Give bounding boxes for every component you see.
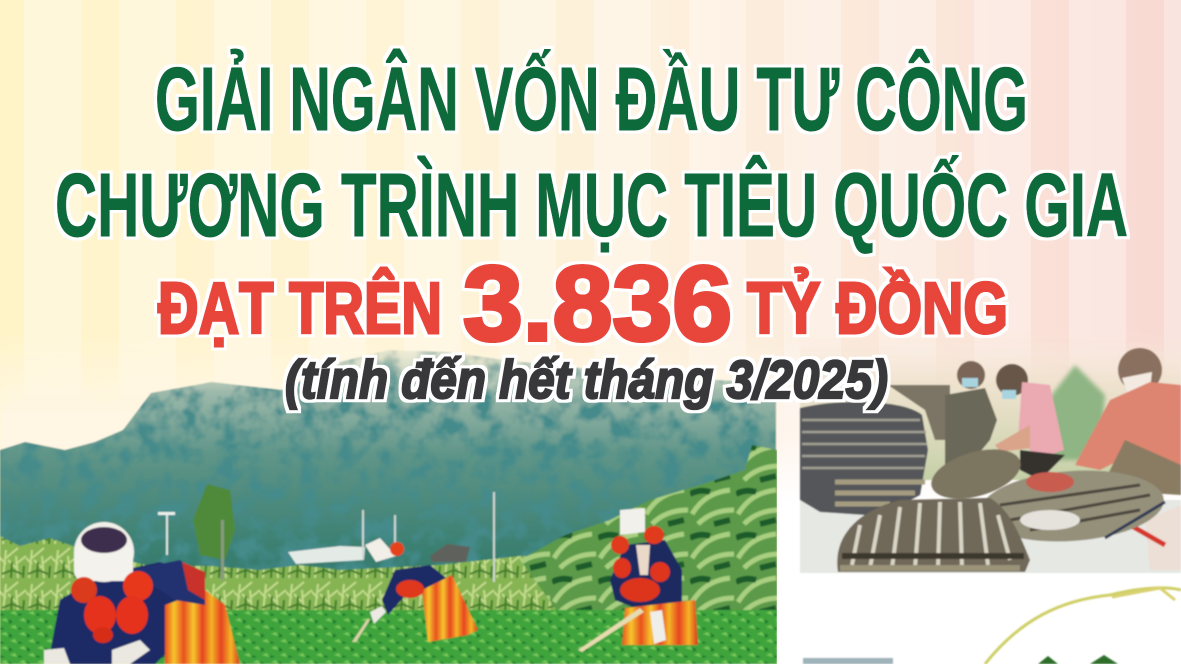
sky (0, 335, 777, 500)
tree (193, 484, 235, 560)
white gutter between photos (777, 340, 1181, 664)
photo: people weaving baskets (800, 330, 1181, 573)
subtitle: date note: (tính đến hết tháng 3/2025) (285, 350, 888, 410)
person: left weaver (945, 361, 997, 470)
corn field (0, 536, 600, 615)
lamp post (166, 515, 168, 555)
middle tray (926, 440, 1026, 508)
mountain (0, 350, 776, 610)
person: pink shirt (995, 364, 1065, 480)
figure: middle woman (352, 538, 478, 642)
banana trees (520, 445, 777, 615)
round woven basket (837, 498, 1030, 572)
backdrop foliage fade (800, 330, 1181, 480)
basket stack (800, 385, 950, 516)
large round tray (978, 465, 1166, 547)
green crop ground (0, 610, 777, 664)
distant house (288, 546, 365, 564)
number: 3.836: 3.836 (463, 245, 732, 363)
title (55, 48, 1128, 256)
poles (362, 492, 495, 582)
label: reached over: ĐẠT TRÊN (158, 268, 442, 349)
figure: right woman (578, 508, 698, 652)
photo: highland farmers in a field (0, 335, 777, 664)
label: billion dong: TỶ ĐỒNG (747, 268, 1008, 349)
figure: left woman (44, 522, 240, 664)
photo: rice stalks lower right (803, 588, 1181, 664)
person: orange shirt (1075, 348, 1181, 570)
headline amount (158, 245, 1008, 363)
